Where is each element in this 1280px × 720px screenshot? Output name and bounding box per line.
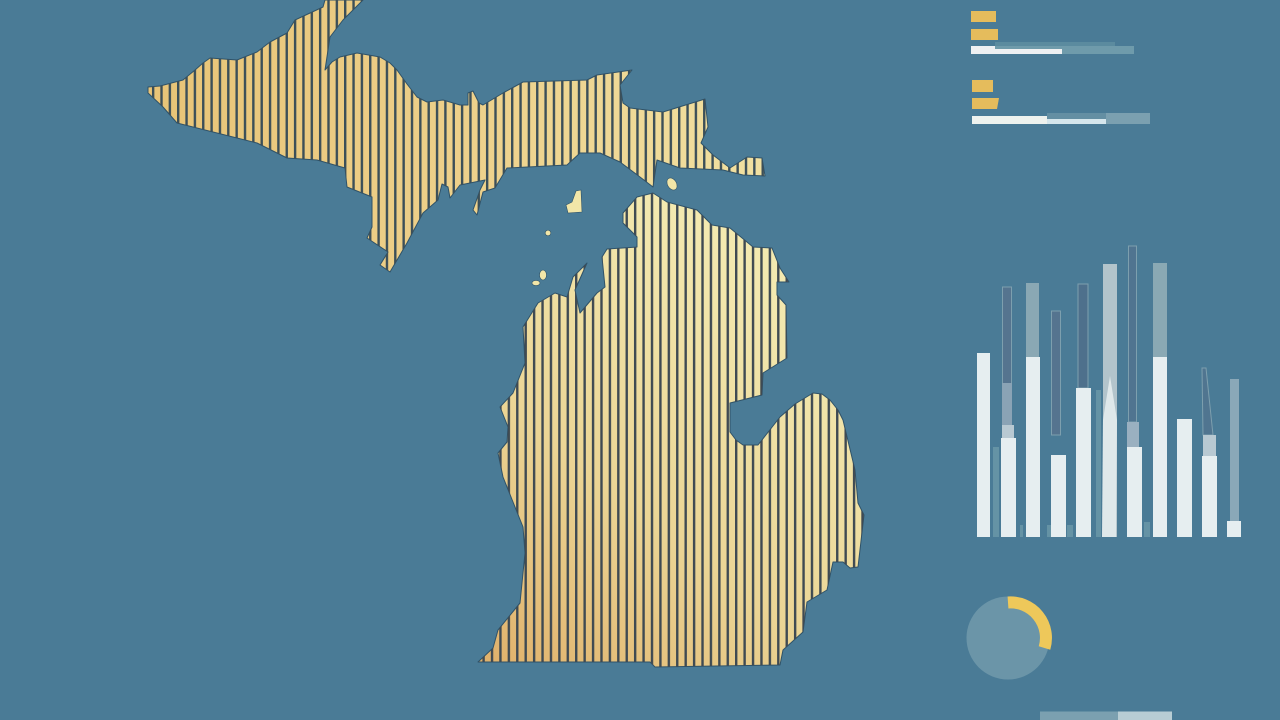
map: islands xyxy=(532,176,679,286)
chart: donut gauge xyxy=(966,596,1050,680)
map: upper peninsula xyxy=(148,0,765,272)
chart: vertical bars xyxy=(977,246,1241,537)
bar 3 xyxy=(1026,283,1040,537)
bar 10 xyxy=(1202,368,1217,537)
map: Michigan xyxy=(148,0,864,667)
bar 6 xyxy=(1102,264,1117,537)
bar 8 xyxy=(1153,263,1167,537)
bar 9 xyxy=(1177,419,1192,537)
progress bar: first xyxy=(971,42,1134,54)
bar 7 xyxy=(1127,246,1142,537)
legend swatches: first group xyxy=(971,11,998,40)
bottom bar xyxy=(1040,712,1172,720)
bar 2 xyxy=(1001,287,1016,537)
donut arc xyxy=(1008,602,1046,648)
bar 4 xyxy=(1051,311,1066,537)
donut base xyxy=(966,596,1050,680)
chart: top progress bars xyxy=(971,11,1150,124)
bar 11 xyxy=(1227,379,1241,537)
bar 5 xyxy=(1076,284,1091,537)
bar 1 xyxy=(977,353,990,537)
legend swatches: second group xyxy=(972,80,999,109)
progress bar: second xyxy=(972,113,1150,124)
faint background bars xyxy=(993,390,1150,537)
map: lower peninsula xyxy=(478,193,864,667)
